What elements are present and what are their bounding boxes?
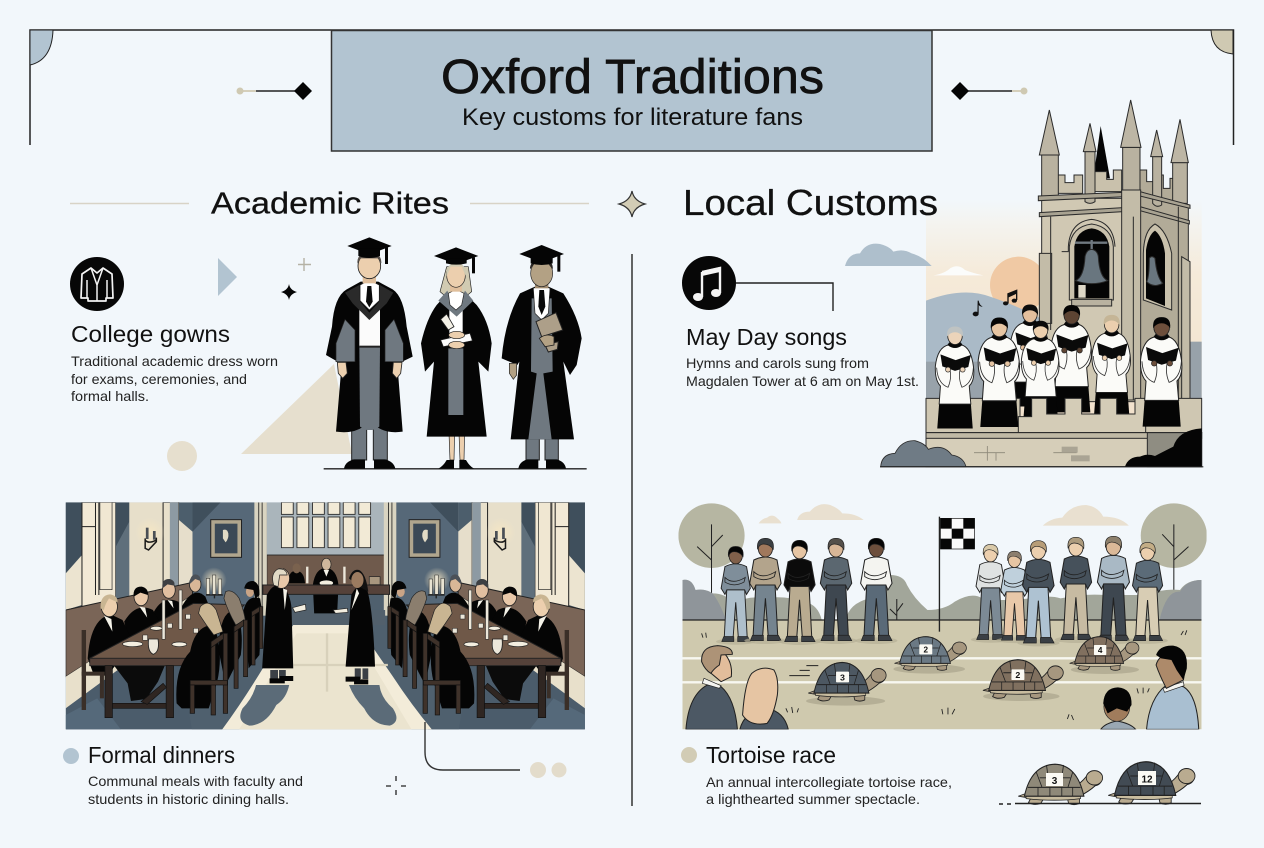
spectators right <box>971 536 1168 646</box>
tortoise 4: 4 <box>1098 646 1103 655</box>
connector <box>736 283 833 311</box>
panel: tortoise race text <box>681 742 952 807</box>
spectators left <box>716 538 897 645</box>
bush: right <box>1125 428 1202 467</box>
icon: music notes <box>682 256 736 310</box>
tortoise 3 <box>789 662 886 706</box>
small tortoise 12: 12 <box>1141 774 1153 786</box>
track ground <box>683 620 1201 729</box>
title banner <box>332 30 932 151</box>
heading: Academic Rites: Academic Rites <box>211 186 449 220</box>
header frame <box>30 30 1234 145</box>
graduate 1 <box>326 237 413 469</box>
decoration: beige triangle <box>241 364 352 454</box>
choir front row <box>935 317 1182 428</box>
ornament: left of banner <box>236 82 312 100</box>
standing figure right <box>333 570 375 684</box>
decoration: beige circle <box>167 441 197 471</box>
standing figure left <box>262 568 306 683</box>
trees <box>678 503 1207 593</box>
heading: Local Customs: Local Customs <box>683 182 938 223</box>
description: a lighthearted summer spectacle. <box>706 791 920 807</box>
floor runner <box>222 625 432 729</box>
sky and sun <box>926 200 1202 467</box>
left side of hall <box>66 502 267 730</box>
tortoise 2 <box>893 637 966 674</box>
title: Oxford Traditions <box>441 51 824 104</box>
description: students in historic dining halls. <box>88 791 289 807</box>
centre bay <box>267 502 385 587</box>
description: for exams, ceremonies, and <box>71 371 247 387</box>
tortoise 3: 3 <box>840 672 845 682</box>
parapet <box>926 398 1202 433</box>
decoration: black star <box>281 284 297 300</box>
tower <box>1038 100 1190 402</box>
choir middle singer <box>1021 321 1059 421</box>
parapet crenellations <box>1018 398 1146 433</box>
heading: College gowns <box>71 321 230 347</box>
centre divider <box>631 254 633 806</box>
description: An annual intercollegiate tortoise race, <box>706 774 952 790</box>
choir back row <box>1010 304 1130 417</box>
clouds <box>845 244 983 275</box>
connector dots <box>530 762 566 778</box>
heading: May Day songs <box>686 324 847 350</box>
illustration: three graduates in gowns <box>324 237 587 469</box>
clouds <box>759 504 1129 526</box>
tortoise 4 <box>1070 637 1139 674</box>
illustration: tortoise race <box>678 503 1207 729</box>
small tortoise 12 <box>1108 762 1195 804</box>
panel: May Day songs <box>682 256 919 389</box>
finish flag <box>939 517 975 632</box>
small tortoise 3 <box>1018 764 1103 805</box>
bush: left <box>881 441 966 467</box>
icon: gown <box>70 257 124 311</box>
ornament: right of banner <box>951 82 1028 100</box>
connector line <box>425 722 520 770</box>
bullet <box>63 748 79 764</box>
heading: Formal dinners <box>88 742 235 768</box>
small tortoise 3: 3 <box>1052 776 1058 787</box>
decoration: blue arrow triangle <box>218 258 237 296</box>
tortoise 2b: 2 <box>1015 670 1020 680</box>
illustration: formal dinner hall <box>66 502 585 729</box>
illustration: Magdalen Tower choir <box>845 100 1203 467</box>
tortoise 2b <box>983 660 1063 701</box>
description: Magdalen Tower at 6 am on May 1st. <box>686 373 919 389</box>
right side of hall <box>384 502 585 730</box>
decoration: plus <box>298 258 311 271</box>
graduate 3 <box>502 245 582 469</box>
tortoise 2: 2 <box>924 645 929 654</box>
description: Communal meals with faculty and <box>88 773 303 789</box>
music notes <box>973 289 1017 316</box>
bushes <box>683 575 1201 620</box>
description: Hymns and carols sung from <box>686 355 869 371</box>
panel: formal dinners text <box>63 742 303 807</box>
bullet <box>681 747 697 763</box>
panel: college gowns <box>70 257 278 404</box>
corner ornament: blue <box>30 30 53 65</box>
foreground viewers left <box>686 646 788 729</box>
icon: centre star <box>619 191 645 217</box>
description: Traditional academic dress worn <box>71 353 278 369</box>
decoration: crosshair <box>386 776 406 795</box>
subtitle: Key customs for literature fans <box>462 104 803 131</box>
corner ornament: beige <box>1211 30 1233 54</box>
floor shadows <box>240 685 289 726</box>
hills <box>926 292 1202 400</box>
high table <box>263 558 390 613</box>
lower wall <box>926 433 1202 467</box>
foreground viewers right <box>1101 646 1199 729</box>
description: formal halls. <box>71 388 149 404</box>
heading: Tortoise race <box>706 742 836 768</box>
graduate 2 <box>421 247 492 469</box>
icon: small tortoises <box>999 762 1201 805</box>
